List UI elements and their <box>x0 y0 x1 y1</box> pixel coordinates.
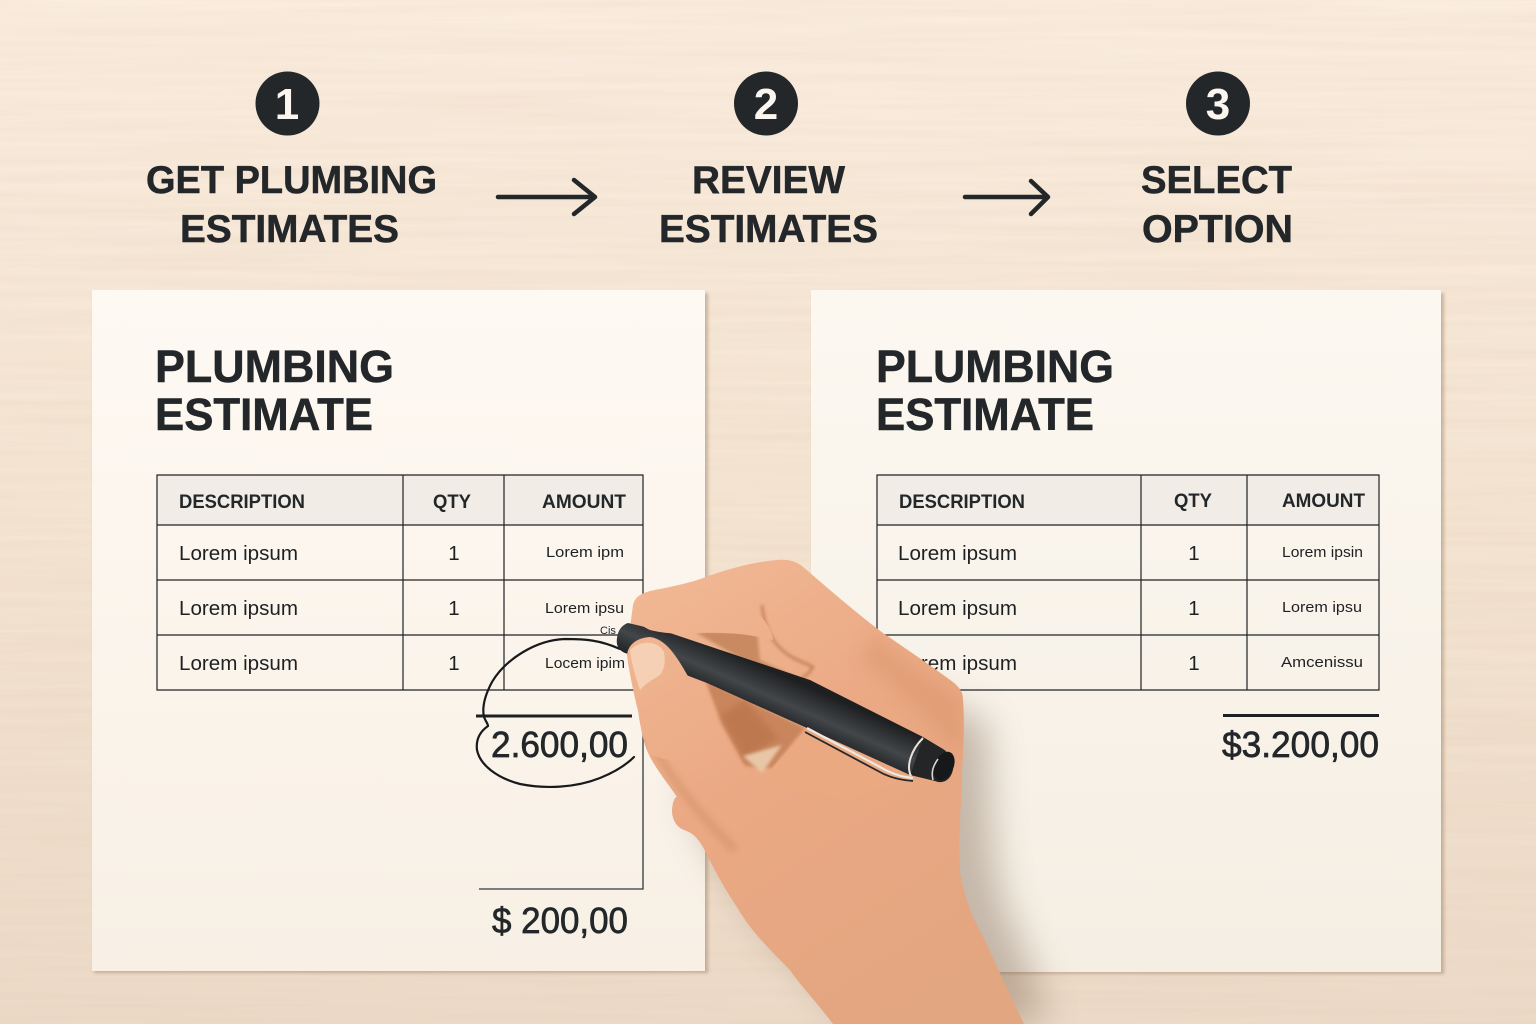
left sheet title <box>155 341 394 440</box>
step 1 heading: ESTIMATES <box>180 208 399 251</box>
thumb over pen <box>627 637 713 770</box>
arrow: step 2 to step 3 <box>965 181 1048 214</box>
left estimate table: Lorem ipsum <box>179 597 298 620</box>
step 2 heading: REVIEW <box>692 159 845 202</box>
left estimate table: Lorem ipsum <box>179 652 298 675</box>
step 1 <box>146 72 437 251</box>
palm ridge under pen <box>772 756 783 768</box>
knuckle shading <box>868 643 958 738</box>
left estimate table <box>157 475 643 690</box>
lower total: $ 200,00 <box>492 900 628 941</box>
right estimate table: 1 <box>1188 542 1200 565</box>
left estimate table: Lorem ipm <box>546 545 624 561</box>
step 3 heading: SELECT <box>1141 159 1292 202</box>
shaded gap above pen <box>696 632 790 673</box>
step 2 heading <box>659 159 878 251</box>
right estimate table: Lorem ipsum <box>898 652 1017 675</box>
index crease <box>762 605 813 678</box>
hand holding pen <box>617 560 1024 1024</box>
right estimate table: Lorem ipsin <box>1282 545 1363 561</box>
pale gap between fingers <box>743 745 782 773</box>
step 2 number badge: 2 <box>754 80 778 129</box>
hand shadow <box>690 690 1045 1024</box>
left sheet title: ESTIMATE <box>155 389 373 440</box>
left estimate table: 1 <box>448 542 460 565</box>
step 1 heading: GET PLUMBING <box>146 159 437 202</box>
step 2 heading: ESTIMATES <box>659 208 878 251</box>
pen clip <box>807 728 913 778</box>
right estimate table: Lorem ipsum <box>898 542 1017 565</box>
arrow: step 1 to step 2 <box>498 180 595 214</box>
panel: right estimate sheet <box>811 290 1444 974</box>
right estimate table: Lorem ipsum <box>898 597 1017 620</box>
pen body <box>617 623 959 784</box>
right estimate table: 1 <box>1188 652 1200 675</box>
right estimate table: QTY <box>1174 490 1212 512</box>
step 2 <box>659 72 878 251</box>
left estimate table: AMOUNT <box>542 491 626 513</box>
left estimate table: Cis <box>600 625 616 637</box>
step 3 heading: OPTION <box>1142 208 1293 251</box>
right estimate table: Lorem ipsu <box>1282 600 1362 616</box>
hand-drawn circle around subtotal <box>477 639 634 787</box>
shaded gap below pen <box>705 680 805 768</box>
right estimate table: AMOUNT <box>1282 490 1365 512</box>
step 1 number badge: 1 <box>275 80 299 129</box>
left estimate table: 1 <box>448 597 460 620</box>
index finger over pen <box>633 588 773 640</box>
left estimate table: Lorem ipsu <box>545 601 624 617</box>
step 3 number badge <box>1186 72 1250 136</box>
panel: left estimate sheet <box>92 290 708 973</box>
step 3 <box>1141 72 1293 251</box>
right estimate table: Amcenissu <box>1281 655 1363 671</box>
step 1 heading <box>146 159 437 251</box>
left estimate table: Lorem ipsum <box>179 542 298 565</box>
left estimate table: 1 <box>448 652 460 675</box>
right estimate table: DESCRIPTION <box>899 491 1025 513</box>
lower total lines <box>479 690 643 889</box>
step 2 number badge <box>734 72 798 136</box>
right total: $3.200,00 <box>1222 724 1379 765</box>
left estimate table: DESCRIPTION <box>179 491 305 513</box>
step 3 heading <box>1141 159 1293 251</box>
left estimate table: Locem ipim <box>545 656 625 672</box>
hand and wrist <box>627 560 1024 1024</box>
curled finger shade <box>654 756 735 850</box>
right sheet title: PLUMBING <box>876 341 1114 392</box>
pen end cap <box>909 737 959 784</box>
right estimate table <box>877 475 1379 690</box>
step 3 number badge: 3 <box>1206 80 1230 129</box>
right estimate table: 1 <box>1188 597 1200 620</box>
left subtotal: 2.600,00 <box>491 724 628 765</box>
left estimate table: QTY <box>433 491 471 513</box>
right sheet title: ESTIMATE <box>876 389 1094 440</box>
left sheet title: PLUMBING <box>155 341 394 392</box>
right sheet title <box>876 341 1114 440</box>
step 1 number badge <box>256 72 320 136</box>
